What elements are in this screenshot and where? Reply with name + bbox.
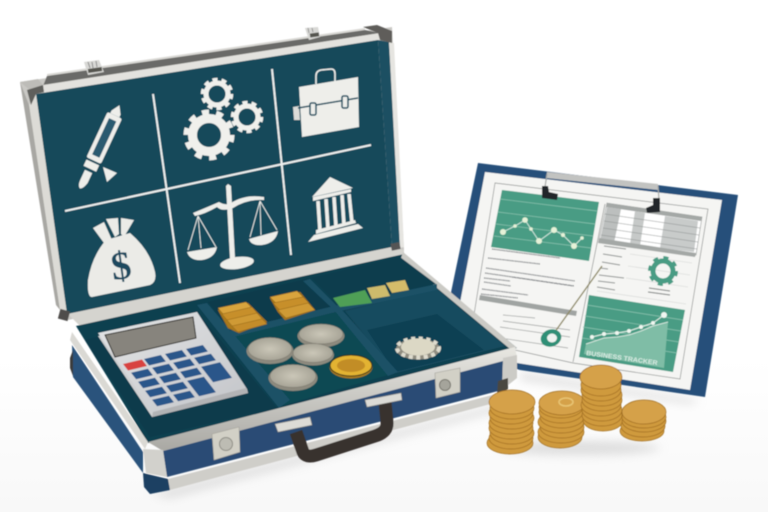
briefcase base (70, 252, 517, 494)
dollar sign: $ (108, 242, 134, 289)
left blue face (72, 345, 143, 473)
icon: money bag (88, 218, 155, 297)
left page text lines (481, 249, 575, 298)
corner left silver (143, 449, 167, 477)
clasp top left (84, 60, 104, 75)
silver coin 4 (268, 364, 318, 391)
top gear (202, 80, 232, 108)
bottom corner (143, 473, 170, 494)
lid top channel (43, 30, 380, 86)
lid of briefcase (20, 25, 404, 326)
tray interior (76, 254, 517, 443)
lid left rail (29, 94, 67, 314)
lid frame (20, 27, 404, 320)
icon: bank building (308, 177, 363, 242)
right latch (435, 368, 460, 398)
data table (598, 203, 702, 257)
corner right silver (502, 355, 517, 390)
left rim (70, 332, 148, 449)
icon: pen flame triangle (103, 167, 117, 182)
gold slice coin (330, 355, 372, 378)
icon: scales (187, 184, 278, 271)
lid bottom rail (68, 247, 404, 326)
gear coin (396, 338, 440, 360)
front blue face (163, 361, 503, 477)
gold bars right (270, 291, 315, 320)
gold bars left (218, 302, 267, 333)
left page lower lines (500, 315, 570, 348)
coin stack 4 (620, 400, 666, 441)
clipboard board (440, 163, 738, 397)
icon: gears (186, 80, 262, 158)
front rim (148, 347, 517, 451)
pointer (538, 266, 602, 349)
gear caption (648, 288, 670, 295)
silver coin 1 (246, 338, 294, 364)
left page section bar (479, 295, 577, 316)
compartment: right floor (367, 314, 484, 372)
coin stack 3 (580, 365, 623, 431)
clip bar (542, 172, 660, 213)
shadows (150, 372, 700, 498)
handle (275, 393, 402, 456)
chart caption: BUSINESS TRACKER (586, 350, 658, 367)
gear icon on page (650, 258, 676, 284)
icon: briefcase (293, 69, 359, 137)
coin stack 1 (487, 390, 535, 454)
yellow notes (367, 285, 390, 299)
icon: pen (73, 102, 127, 192)
line chart panel (491, 190, 599, 261)
hinge (390, 242, 401, 251)
dividers (197, 279, 437, 408)
calculator (98, 312, 248, 417)
page outline (470, 183, 708, 379)
silver coin 3 (292, 344, 334, 366)
lid top outer edge (47, 28, 365, 76)
compartment: right wall (345, 289, 505, 373)
right rim (401, 252, 517, 349)
lid top lip (43, 33, 381, 93)
right gear (232, 102, 262, 132)
clasp top right (305, 27, 320, 40)
big gear (186, 112, 232, 158)
left latch (212, 427, 240, 460)
paper sheet (450, 172, 722, 390)
keys (123, 344, 239, 406)
coin stack 2 (538, 391, 585, 448)
display (105, 317, 196, 357)
dividing lines (65, 69, 371, 283)
growth chart panel (579, 295, 685, 372)
hinge dark (70, 350, 73, 376)
compartment: top right (312, 257, 436, 306)
green note (333, 290, 372, 307)
bottom silver strip (168, 393, 500, 490)
silver coin 2 (298, 324, 344, 348)
corner top-left (20, 79, 44, 105)
compartment: centre floor (233, 312, 388, 405)
clipboard (440, 163, 738, 397)
compartment: calculator floor (85, 312, 277, 437)
compartment: top left (208, 279, 335, 331)
list lines beside gear (597, 246, 626, 290)
lid teal panel (36, 40, 392, 314)
corner top-right (363, 25, 392, 43)
